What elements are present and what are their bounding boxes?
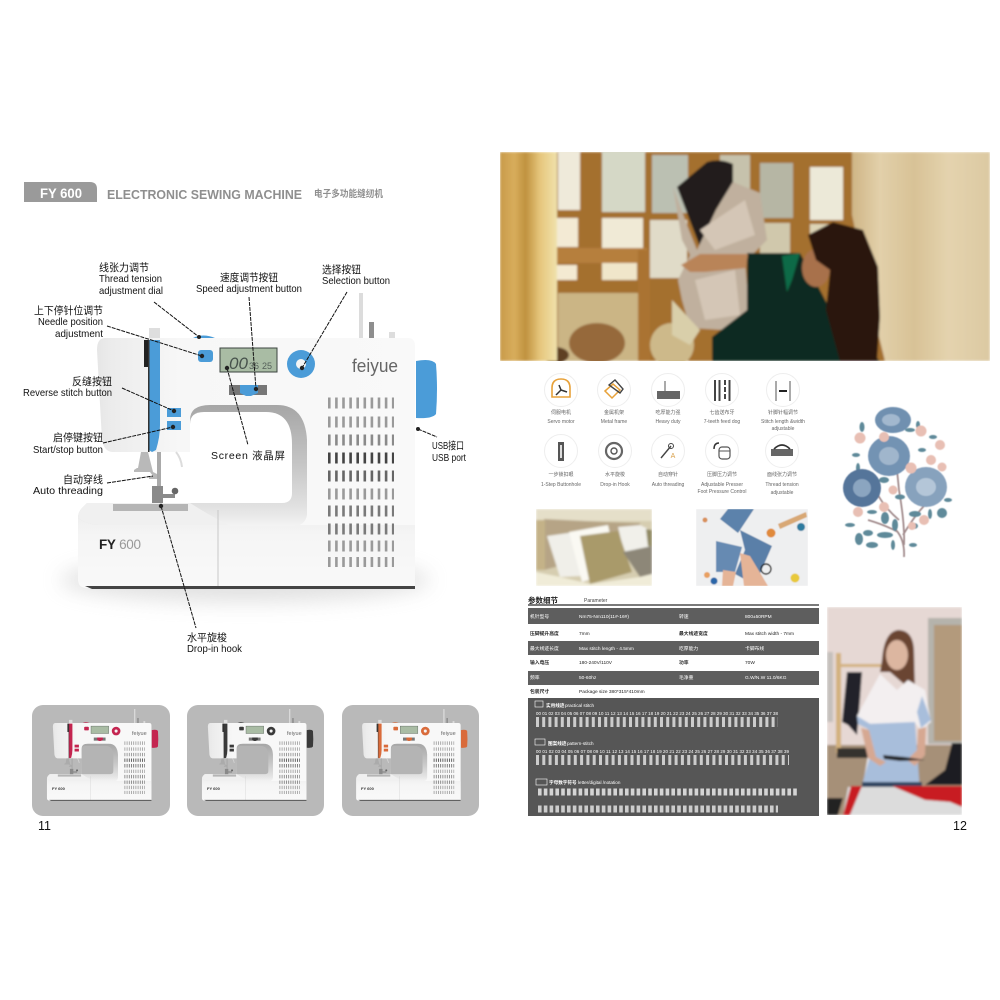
feature icons — [541, 374, 805, 496]
letter digital notation — [536, 779, 798, 809]
colour variant: red — [32, 705, 170, 816]
row 6: Package size 380*315*410mm — [579, 689, 645, 695]
pattern stitch: 图案线迹 — [548, 740, 567, 747]
letter digital notation: 字母数字符号 — [549, 779, 577, 786]
callout: needle position — [34, 304, 204, 358]
row 2: Max stitch width - 7mm — [745, 631, 794, 637]
row 3: 卡脚布线 — [745, 645, 764, 652]
practical stitch: 00 01 02 03 04 05 06 07 08 09 10 11 12 13 14 15 16 17 18 19 20 21 22 23 24 25 26 27 28 29 30 31 32 33 34 35 36 37 38 — [536, 711, 779, 716]
feature: feed dog: 7-teeth feed dog — [704, 419, 740, 425]
callout: thread tension: adjustment dial — [99, 285, 163, 297]
row 6: 包装尺寸 — [530, 688, 549, 695]
callout: drop-in hook: 水平旋梭 — [187, 631, 227, 644]
row 4: 180-240V/110V — [579, 660, 613, 666]
row 2: 7mm — [579, 631, 590, 637]
face — [886, 640, 908, 670]
feature: thread tension: 面线张力调节 — [767, 471, 797, 478]
feature: presser foot pressure: Foot Pressure Control — [698, 489, 746, 495]
feature: metal frame — [598, 374, 630, 425]
photo: woman in striped shirt — [827, 607, 962, 815]
colour variant: black — [187, 705, 324, 816]
callout: selection button — [300, 263, 390, 370]
back pillows — [544, 519, 640, 570]
feature: stitch length: 针脚针幅调节 — [768, 409, 798, 416]
easel — [555, 248, 647, 263]
row 6 — [530, 688, 645, 695]
clothes rack — [827, 652, 881, 758]
row 1: 800±50RPM — [745, 614, 772, 620]
row 4 — [530, 659, 755, 666]
row 1: 机针型号 — [530, 613, 549, 620]
callout: screen: Screen 液晶屏 — [211, 449, 285, 462]
arm — [681, 254, 748, 272]
row 5: 毛净重 — [679, 674, 694, 681]
page number 11: 11 — [38, 819, 51, 833]
machine body — [78, 293, 437, 589]
feature: presser foot pressure — [698, 434, 746, 495]
practical stitch: practical stitch — [565, 703, 595, 708]
lcd screen digits: 25 — [262, 361, 272, 371]
face — [802, 249, 830, 287]
model tab: FY 600 — [40, 186, 82, 201]
header bar — [24, 182, 383, 202]
row 4: 输入电压 — [530, 659, 549, 666]
wall and dried flowers — [558, 293, 638, 361]
feature: stitch length: adjustable — [772, 426, 795, 432]
row 2: 压脚提升高度 — [530, 630, 559, 637]
shears — [883, 755, 925, 761]
shirt — [855, 674, 932, 774]
callout: thread tension: 线张力调节 — [99, 261, 149, 274]
draped fabric — [673, 182, 767, 330]
photo: woman draping mannequin — [500, 150, 990, 367]
row 5 — [530, 674, 787, 681]
feature: auto threading: 自动穿针 — [658, 471, 678, 478]
white pillows — [546, 532, 581, 578]
window panes — [555, 150, 843, 280]
black machine — [202, 709, 313, 801]
callout: screen — [211, 366, 285, 462]
table heading: 参数细节 — [528, 595, 558, 605]
lcd screen digits — [229, 354, 272, 373]
pattern stitch: 00 01 02 03 04 05 06 07 08 09 10 11 12 13 14 15 16 17 18 19 20 21 22 23 24 25 26 27 28 29 30 31 32 33 34 35 36 37 38 39 — [536, 749, 790, 754]
callout: needle position: Needle position — [38, 316, 103, 328]
table with red fabric — [843, 787, 962, 815]
model tab — [24, 182, 97, 202]
ruler and spools — [778, 512, 807, 529]
row 3: 吃厚能力 — [679, 645, 698, 652]
callout: thread tension: Thread tension — [99, 273, 162, 285]
feature: servo motor: 伺服电机 — [551, 409, 571, 416]
callout: speed adjustment: Speed adjustment button — [196, 283, 302, 295]
callout: reverse stitch: Reverse stitch button — [23, 387, 112, 399]
callout: selection button: 选择按钮 — [322, 263, 361, 276]
callout: usb port: USB port — [432, 452, 466, 464]
blue roses — [843, 407, 947, 507]
feature: stitch length: Stitch length &width — [761, 419, 805, 425]
textured cushion — [623, 546, 652, 577]
brand logo: feiyue — [352, 355, 398, 376]
letter digital notation: letter/digital /notation — [578, 780, 621, 785]
callout: reverse stitch: 反缝按钮 — [72, 375, 112, 388]
row 4: 70W — [745, 660, 755, 666]
feature: feed dog: 七齿送布牙 — [709, 409, 735, 416]
feature: thread tension: adjustable — [771, 490, 794, 496]
mannequin torso — [677, 160, 733, 247]
table heading — [528, 595, 819, 606]
feature: presser foot pressure: 压脚压力调节 — [707, 471, 737, 478]
table stripes — [528, 608, 819, 685]
heading chinese: 电子多功能缝纫机 — [314, 188, 383, 200]
feature: metal frame: Metal frame — [601, 419, 627, 425]
chair — [925, 743, 962, 785]
row 3: 最大线迹长度 — [530, 645, 559, 652]
colour variant: orange — [342, 705, 479, 816]
arms — [861, 728, 886, 766]
photo: denim sewing — [696, 509, 808, 586]
callout: start stop: 启停键按钮 — [53, 431, 103, 444]
model label: FY 600 — [99, 537, 141, 552]
callout: usb port — [416, 427, 466, 464]
pattern stitch — [535, 739, 790, 760]
practical stitch — [535, 701, 779, 722]
feature: stitch length — [761, 374, 805, 432]
callout: start stop — [33, 425, 175, 456]
orange machine: feiyue — [441, 731, 456, 737]
red machine: FY 600 — [52, 786, 66, 791]
stitch pattern panel — [528, 698, 819, 816]
callout: usb port: USB接口 — [432, 439, 464, 452]
feature: metal frame: 金属机架 — [604, 409, 624, 416]
practical stitch: 实用线迹 — [546, 702, 565, 709]
callouts — [23, 261, 466, 655]
hands — [740, 553, 768, 586]
feature: buttonhole: 一步锁扣眼 — [548, 471, 574, 478]
bed — [536, 572, 652, 586]
feature: drop-in hook — [598, 434, 632, 488]
pattern stitch: pattern-stitch — [567, 741, 594, 746]
black machine: FY 600 — [207, 786, 221, 791]
callout: auto threading: 自动穿线 — [63, 473, 103, 486]
row 5: 频率 — [530, 674, 540, 681]
callout: drop-in hook: Drop-in hook — [187, 643, 243, 655]
photo: pillows — [536, 509, 652, 586]
machine shadow — [60, 558, 430, 602]
right curtain — [852, 152, 990, 361]
jeans — [862, 782, 922, 787]
feature: buttonhole — [541, 434, 581, 488]
row 1: Nm75-Nm110(11#-16#) — [579, 614, 629, 620]
feature: thread tension: Thread tension — [765, 482, 799, 488]
feature: thread tension — [765, 434, 799, 496]
feature: heavy duty: Heavy duty — [655, 419, 681, 425]
callout: needle position: 上下停针位调节 — [34, 304, 103, 317]
red machine — [47, 709, 158, 801]
feature: buttonhole: 1-Step Buttonhole — [541, 482, 581, 488]
feature: auto threading: Auto threading — [652, 482, 684, 488]
row 3 — [530, 645, 764, 652]
callout: auto threading — [33, 473, 153, 497]
callout: selection button: Selection button — [322, 275, 390, 287]
callout: speed adjustment: 速度调节按钮 — [220, 271, 278, 284]
feature: auto threading: A — [671, 453, 676, 460]
red machine: feiyue — [132, 731, 147, 737]
callout: needle position: adjustment — [55, 328, 103, 340]
parameter table — [528, 595, 819, 695]
lcd screen digits: 36 — [249, 361, 259, 371]
feature: servo motor: Servo motor — [547, 419, 575, 425]
denim patches — [720, 509, 754, 533]
hair — [880, 630, 915, 690]
stems — [868, 460, 925, 557]
page number 12: 12 — [953, 819, 967, 833]
row 4: 功率 — [679, 659, 689, 666]
left curtain — [500, 152, 557, 361]
callout: start stop: Start/stop button — [33, 444, 103, 456]
row 1: 转速 — [679, 613, 689, 620]
feature: presser foot pressure: Adjustable Presser — [701, 482, 743, 488]
row 1 — [530, 613, 772, 620]
row 2 — [530, 630, 794, 637]
lcd screen digits: 00 — [229, 354, 248, 373]
hair — [808, 222, 880, 361]
row 5: 50-60hz — [579, 675, 597, 681]
orange machine: FY 600 — [361, 786, 375, 791]
leaves — [845, 421, 952, 550]
door — [928, 618, 962, 744]
callout: speed adjustment — [196, 271, 302, 391]
callout: auto threading: Auto threading — [33, 485, 103, 497]
pink blossoms — [853, 426, 946, 530]
orange machine — [356, 709, 467, 801]
feature: heavy duty — [652, 374, 684, 425]
row 3: Max stitch length - 4.5mm — [579, 646, 634, 652]
callout: drop-in hook — [159, 504, 243, 655]
table heading: Parameter — [584, 598, 608, 604]
feature: drop-in hook: 水平旋梭 — [605, 471, 625, 478]
feature: feed dog — [704, 374, 740, 425]
row 5: G.W/N.W 11.0/6KG — [745, 675, 787, 681]
feature: drop-in hook: Drop-in Hook — [600, 482, 630, 488]
main sewing machine diagram — [60, 293, 437, 602]
heading: ELECTRONIC SEWING MACHINE — [107, 187, 302, 202]
feature: heavy duty: 吃厚能力强 — [655, 409, 681, 416]
feature: auto threading — [652, 434, 684, 488]
feature: servo motor — [544, 374, 578, 425]
olive cushion — [580, 531, 632, 584]
callout: reverse stitch — [23, 375, 176, 413]
row 2: 最大线迹宽度 — [679, 630, 708, 637]
callout: thread tension — [99, 261, 201, 339]
floral illustration — [843, 407, 952, 557]
black machine: feiyue — [287, 731, 302, 737]
woman's robe — [712, 253, 880, 361]
